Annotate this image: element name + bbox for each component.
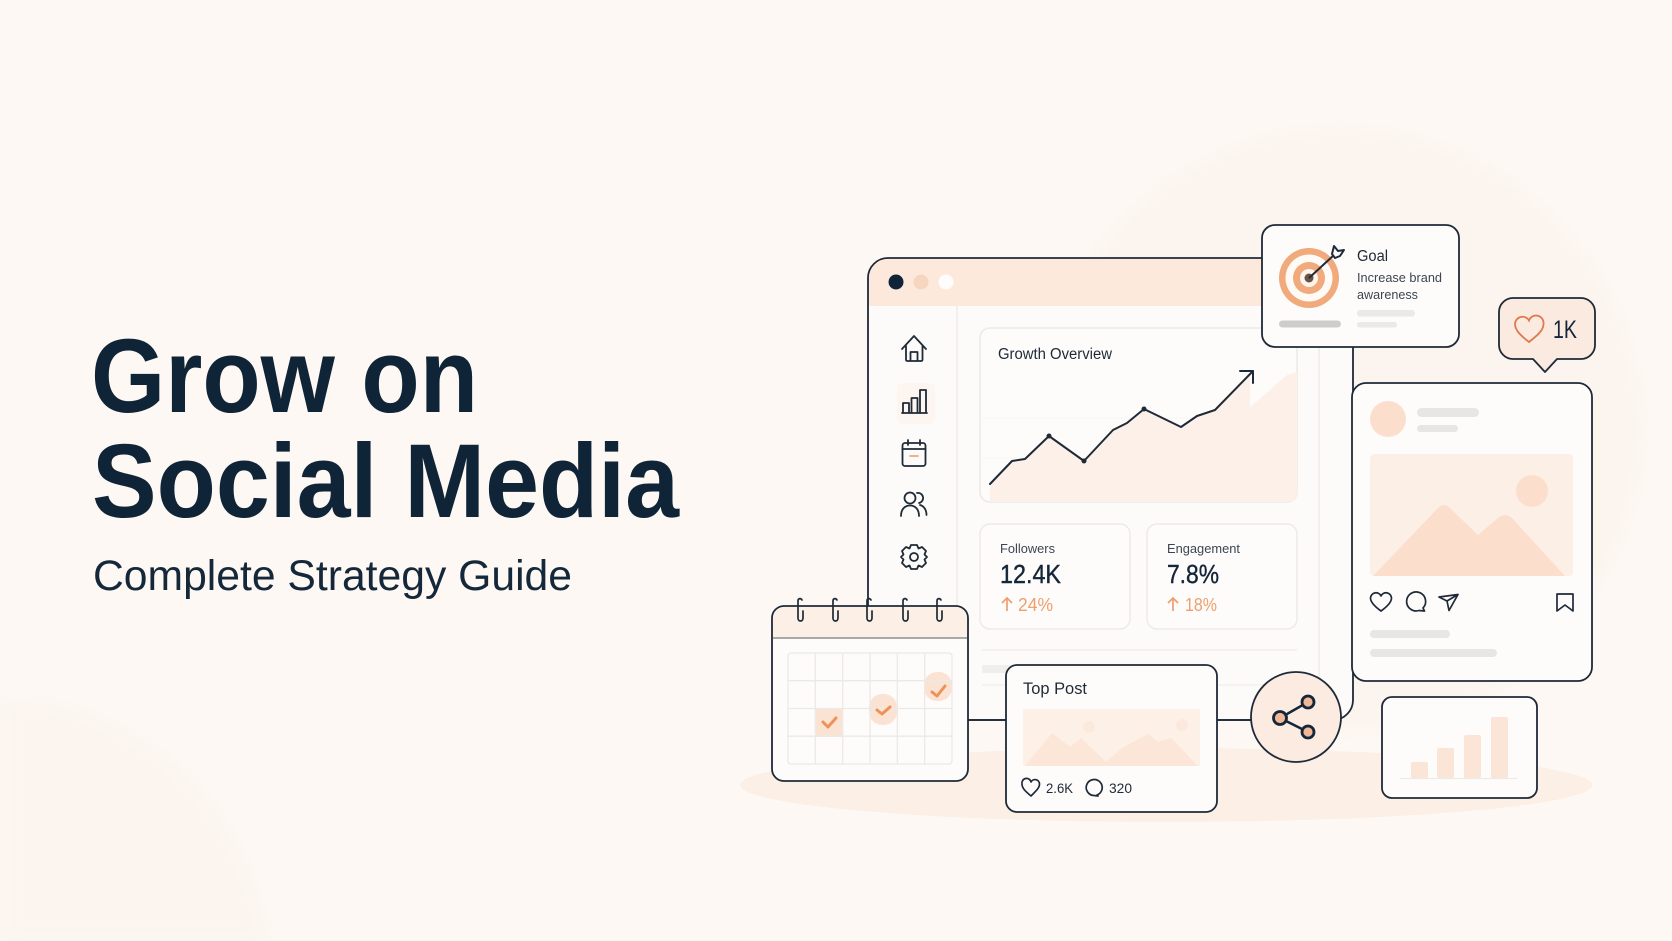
panel: engagement stat: Engagement [1167, 541, 1240, 556]
callout: likes bubble: 1K [1553, 316, 1577, 344]
icon: target [1279, 246, 1344, 308]
top post image [1023, 709, 1200, 766]
panel: growth overview chart [980, 328, 1297, 502]
icon: gear [901, 545, 927, 569]
panel: goal card: Increase brand [1357, 270, 1442, 285]
icon: calendar [902, 440, 926, 466]
sidebar icons [897, 336, 935, 569]
panel: engagement stat: 7.8% [1167, 559, 1219, 589]
panel: followers stat [980, 524, 1130, 629]
panel: top post [1006, 665, 1217, 812]
title: Social Media [92, 423, 680, 540]
panel: engagement stat [1147, 524, 1297, 629]
panel: goal card: awareness [1357, 287, 1418, 302]
panel: dashboard window [868, 258, 1353, 720]
callout: likes bubble [1499, 298, 1595, 372]
name placeholders [1417, 408, 1479, 432]
panel: followers stat: 12.4K [1000, 559, 1062, 589]
post image [1370, 454, 1573, 576]
top post stats [1022, 778, 1102, 796]
icon: like [1370, 593, 1392, 611]
title: Grow on [91, 318, 478, 435]
faint list rows [982, 650, 1297, 685]
icon: heart [1515, 316, 1544, 342]
avatar [1370, 401, 1406, 437]
caption placeholders [1370, 630, 1497, 657]
icon: comment [1407, 592, 1426, 611]
panel: top post: 2.6K [1046, 781, 1073, 796]
icon: bar chart [902, 390, 927, 413]
panel: mini bar chart [1382, 697, 1537, 798]
check marks [823, 686, 945, 727]
ground ellipse [740, 748, 1592, 822]
calendar header [773, 607, 967, 638]
title [91, 318, 680, 540]
placeholder bars [1279, 310, 1415, 328]
panel: followers stat: 24% [1018, 595, 1053, 615]
panel: social post card [1352, 383, 1592, 681]
chart heading: Growth Overview [998, 346, 1113, 363]
panel: top post: Top Post [1023, 679, 1087, 698]
icon: share circle [1251, 672, 1341, 762]
subtitle: Complete Strategy Guide [93, 552, 572, 600]
panel: top post: 320 [1109, 781, 1132, 796]
icon: send [1439, 594, 1458, 610]
calendar rings [798, 599, 942, 621]
icon: users [901, 492, 926, 516]
icon: home [902, 336, 926, 361]
growth line [990, 371, 1253, 484]
post action icons [1370, 592, 1573, 611]
panel: calendar [772, 599, 968, 781]
window title bar [869, 259, 1300, 306]
panel: engagement stat: 18% [1185, 595, 1217, 615]
calendar highlights [815, 672, 952, 737]
panel: followers stat: Followers [1000, 541, 1055, 556]
goal text: Goal [1357, 248, 1388, 265]
icon: bookmark [1557, 594, 1573, 611]
connector lines [968, 719, 1252, 721]
panel: goal card [1262, 225, 1459, 347]
chart area fill [990, 372, 1297, 502]
calendar grid [788, 653, 952, 764]
